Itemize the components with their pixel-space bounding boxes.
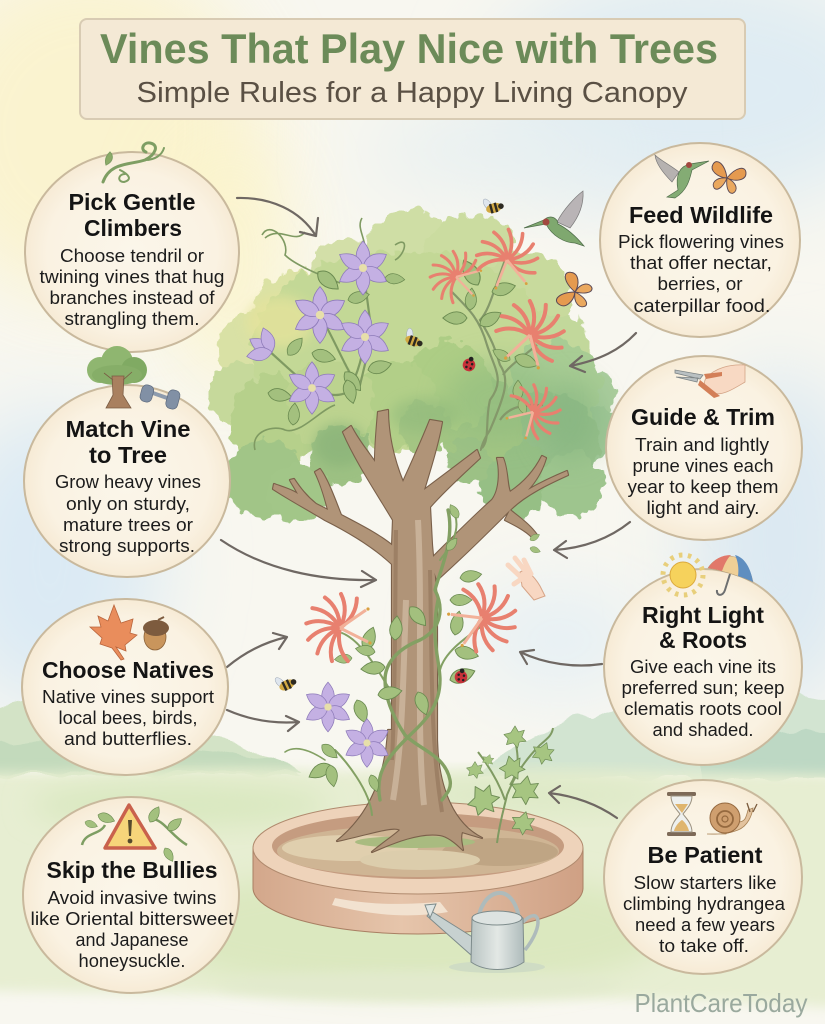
title banner: [80, 19, 745, 119]
ivy plant beside trunk: [462, 726, 557, 843]
body text: to take off.: [659, 936, 749, 956]
icon: snail: [707, 803, 757, 834]
bee and ladybug in canopy: [402, 326, 478, 373]
planter: rim, wall and soil: [253, 802, 583, 934]
body text: strong supports.: [59, 536, 195, 556]
body text: preferred sun; keep: [622, 678, 784, 698]
body text: and butterflies.: [64, 729, 192, 749]
body text: Train and lightly: [635, 435, 769, 455]
body text: light and airy.: [646, 498, 760, 518]
arrow: Be Patient to ivy: [549, 786, 617, 818]
panel: Feed Wildlife: [600, 143, 800, 337]
upper leaves: [267, 257, 540, 425]
heading: Feed Wildlife: [629, 202, 773, 228]
brand watermark: PlantCareToday: [634, 988, 808, 1018]
body text: caterpillar food.: [634, 296, 770, 316]
icon: bee near top: [481, 194, 505, 215]
panel: Pick Gentle Climbers: [25, 143, 239, 352]
lower vine twining around trunk: [285, 510, 490, 815]
arrow: Feed Wildlife to canopy: [570, 333, 636, 372]
icon: umbrella: [708, 555, 753, 595]
heading: Choose Natives: [42, 657, 214, 683]
arrow: Match Vine to Tree to trunk: [221, 540, 376, 587]
bee and ladybug near trunk: [272, 667, 469, 694]
honeysuckle flowers in canopy: [423, 227, 574, 449]
arrow: Guide and Trim to twig: [554, 522, 630, 558]
body text: and shaded.: [652, 720, 754, 740]
heading: Climbers: [84, 215, 182, 241]
body text: local bees, birds,: [58, 708, 198, 728]
panel: Right Light and Roots: [604, 555, 802, 765]
body text: [40, 246, 224, 329]
body text: [30, 888, 234, 971]
body text: [622, 657, 784, 740]
icon: butterfly: [707, 161, 747, 196]
body text: berries, or: [658, 274, 743, 294]
body text: strangling them.: [64, 309, 200, 329]
tree canopy: [208, 209, 618, 522]
heading: [66, 416, 190, 468]
subtitle: Simple Rules for a Happy Living Canopy: [136, 77, 688, 109]
heading: Skip the Bullies: [46, 857, 218, 883]
body text: mature trees or: [63, 515, 193, 535]
lower leaves: [306, 503, 541, 793]
icon: butterfly by the tree: [555, 271, 595, 313]
arrow: Pick Gentle Climbers to canopy: [237, 198, 318, 236]
icon: pruning shears in hand: [675, 365, 745, 398]
body text: twining vines that hug: [40, 267, 224, 287]
body text: Give each vine its: [630, 657, 776, 677]
distant green hills: [0, 683, 825, 778]
icon: dumbbell: [139, 384, 181, 410]
arrow: Choose Natives to honeysuckle: [227, 633, 287, 667]
heading: to Tree: [89, 442, 167, 468]
body text: Slow starters like: [634, 873, 776, 893]
body text: that offer nectar,: [630, 253, 772, 273]
clematis flowers near trunk: [303, 682, 391, 767]
honeysuckle flowers near trunk: [306, 574, 525, 662]
body text: like Oriental bittersweet: [30, 909, 234, 929]
body text: year to keep them: [628, 477, 778, 497]
icon: hourglass: [667, 792, 696, 836]
heading: Match Vine: [66, 416, 190, 442]
lawn: [0, 769, 825, 1010]
icon: sun: [663, 555, 703, 595]
body text: need a few years: [635, 915, 775, 935]
body text: branches instead of: [50, 288, 216, 308]
heading: Guide & Trim: [631, 404, 775, 430]
title: Vines That Play Nice with Trees: [100, 25, 718, 72]
icon: small tree: [87, 346, 147, 408]
body text: only on sturdy,: [66, 494, 190, 514]
body text: Pick flowering vines: [618, 232, 784, 252]
heading: [642, 602, 764, 653]
body text: Choose tendril or: [60, 246, 204, 266]
arrow: Right Light to honeysuckle: [520, 650, 602, 666]
upper vines with leaves: [254, 218, 543, 450]
body text: Avoid invasive twins: [48, 888, 217, 908]
body text: Grow heavy vines: [55, 472, 201, 492]
arrow: Choose Natives to clematis: [227, 710, 299, 731]
heading: & Roots: [659, 627, 747, 653]
body text: [628, 435, 778, 518]
body text: [618, 232, 784, 316]
panel: Guide and Trim: [606, 356, 802, 540]
heading: Right Light: [642, 602, 764, 628]
body text: prune vines each: [632, 456, 774, 476]
body text: honeysuckle.: [78, 951, 186, 971]
body text: [623, 873, 786, 956]
body text: climbing hydrangea: [623, 894, 786, 914]
icon: curly vine: [103, 143, 164, 182]
icon: warning sign with vines: [82, 805, 187, 863]
heading: Be Patient: [648, 842, 763, 868]
icon: acorn: [143, 617, 169, 650]
panel: Be Patient: [604, 780, 802, 974]
icon: hummingbird: [655, 155, 709, 198]
heading: Pick Gentle: [68, 189, 196, 215]
body text: and Japanese: [76, 930, 188, 950]
body text: Native vines support: [42, 687, 214, 707]
icon: pruning hand: [508, 558, 545, 600]
body text: [42, 687, 214, 749]
clematis flowers in canopy: [239, 241, 392, 414]
body text: [55, 472, 201, 556]
tree trunk and branches: [273, 410, 568, 852]
body text: clematis roots cool: [624, 699, 782, 719]
watering can: [425, 893, 545, 973]
panel: Match Vine to Tree: [24, 346, 230, 577]
icon: hummingbird in tree top: [524, 191, 584, 246]
panel: Skip the Bullies: [23, 797, 239, 993]
icon: maple leaf: [90, 605, 137, 660]
heading: [68, 189, 196, 241]
panel: Choose Natives: [22, 599, 228, 775]
